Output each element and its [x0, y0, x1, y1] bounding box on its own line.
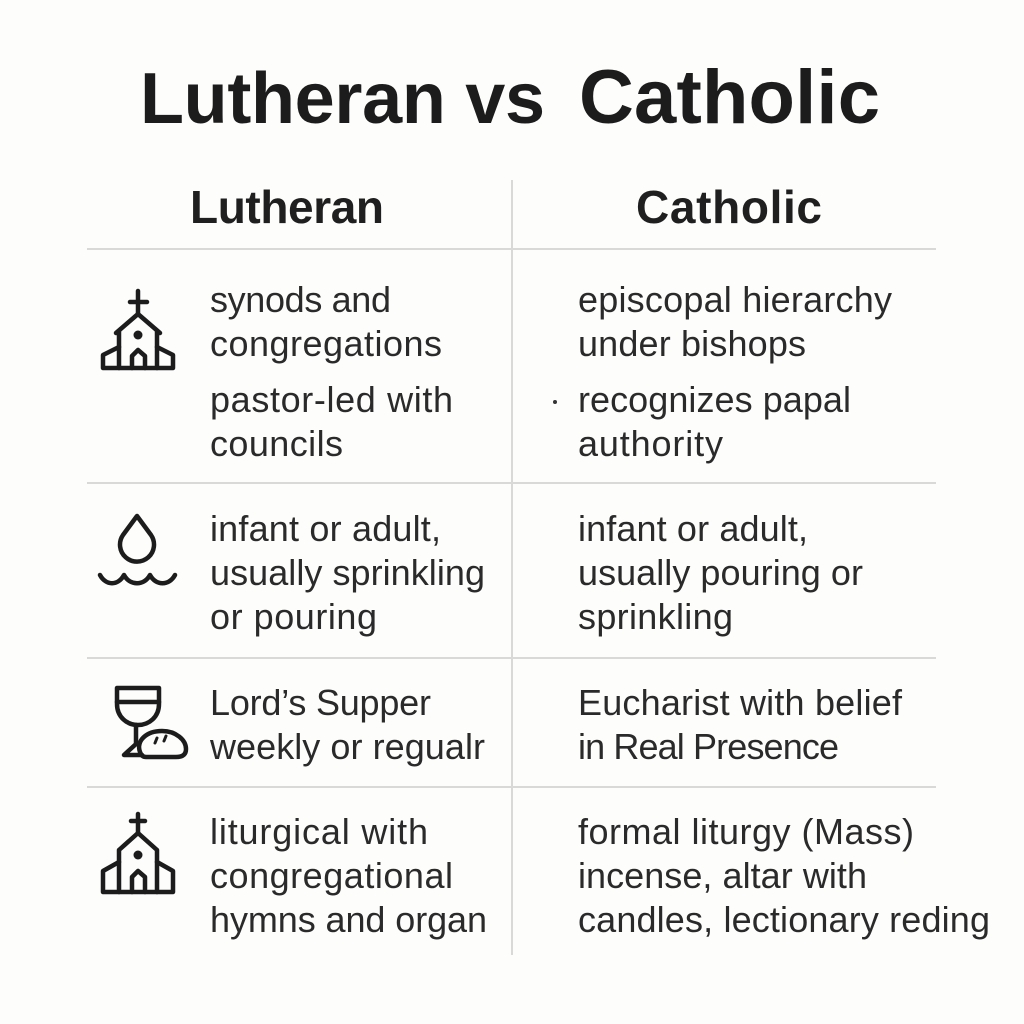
icon: church (governance) — [103, 291, 173, 368]
text: Catholic worship: incense, altar with — [578, 855, 867, 896]
text: Catholic governance — [553, 279, 892, 464]
text: Catholic governance: episcopal hierarchy — [578, 279, 892, 320]
text: Catholic baptism: usually pouring or — [578, 552, 863, 593]
text: Catholic baptism — [578, 508, 863, 637]
text: Catholic governance: recognizes papal — [578, 379, 851, 420]
text: Lutheran communion: weekly or regualr — [209, 726, 485, 767]
text: Catholic communion: Eucharist with belief — [578, 682, 903, 723]
text: Catholic governance: under bishops — [578, 323, 806, 364]
text: Lutheran governance — [210, 279, 453, 464]
text: Catholic worship — [578, 811, 990, 940]
text: Catholic baptism: infant or adult, — [578, 508, 808, 549]
text: Lutheran communion: Lord’s Supper — [210, 682, 431, 723]
text: Catholic communion — [578, 682, 903, 767]
text: Catholic worship: candles, lectionary reding — [578, 899, 990, 940]
text: Lutheran worship: hymns and organ — [210, 899, 487, 940]
column heading: Lutheran: Lutheran — [190, 181, 384, 233]
text: Catholic governance: authority — [578, 423, 723, 464]
column heading: Catholic: Catholic — [636, 181, 822, 233]
text: Lutheran baptism: infant or adult, — [210, 508, 441, 549]
title: Catholic — [579, 55, 880, 140]
title — [140, 55, 880, 140]
text: Lutheran baptism — [210, 508, 485, 637]
text: Catholic communion: in Real Presence — [578, 726, 839, 767]
text: Catholic worship: formal liturgy (Mass) — [578, 811, 914, 852]
text: Lutheran governance: synods and — [210, 279, 391, 320]
icon: chalice and bread (communion) — [117, 688, 186, 757]
text: Lutheran worship: liturgical with — [210, 811, 428, 852]
text: Lutheran governance: pastor-led with — [210, 379, 453, 420]
text: Lutheran communion — [209, 682, 485, 767]
icon: water drop and waves (baptism) — [100, 516, 175, 583]
text: Lutheran baptism: usually sprinkling — [210, 552, 485, 593]
text: Lutheran governance: congregations — [210, 323, 442, 364]
text: Lutheran baptism: or pouring — [210, 596, 377, 637]
title: Lutheran vs — [140, 59, 545, 139]
text: Lutheran worship — [210, 811, 487, 940]
text: Catholic baptism: sprinkling — [578, 596, 733, 637]
text: Lutheran worship: congregational — [210, 855, 453, 896]
text: Lutheran governance: councils — [210, 423, 343, 464]
icon: church (worship) — [103, 814, 173, 892]
